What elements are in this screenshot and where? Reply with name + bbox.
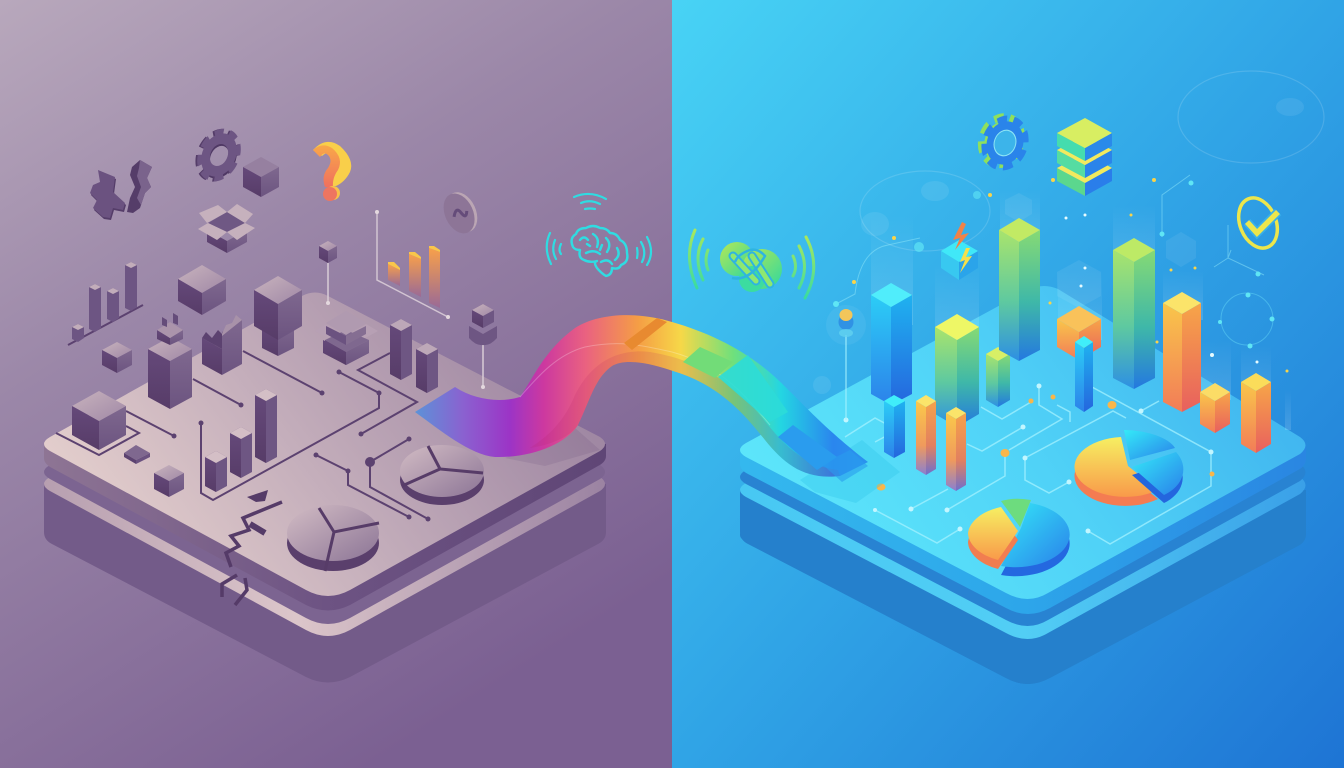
panel: modern platform [740, 286, 1306, 684]
crack in platform [222, 490, 282, 605]
platform lower side [740, 490, 1306, 684]
block: small cube left [102, 342, 132, 373]
icon: bolt cube [941, 222, 978, 280]
platform reflection [44, 378, 605, 681]
panel: legacy platform [44, 292, 606, 682]
icon: blue gear [974, 111, 1032, 172]
platform side [44, 444, 606, 610]
bar: green wide [935, 314, 979, 427]
block: open box on platform [315, 311, 378, 365]
icon: pin marker [826, 305, 866, 420]
transformation ribbon [415, 315, 868, 482]
circuit nodes [844, 384, 1214, 534]
bar: small blue front [884, 395, 905, 458]
bar: green tallest [999, 218, 1040, 361]
platform lower layer side [44, 484, 606, 682]
ribbon shadow [505, 428, 600, 466]
icon: data stack [1057, 118, 1112, 196]
block: stacked tower [254, 276, 302, 356]
platform reflection [740, 371, 1306, 684]
icon: ring [438, 187, 483, 238]
icon: gear [191, 125, 245, 185]
amber nodes [876, 394, 1214, 490]
faint network rings [860, 71, 1324, 251]
faint bubbles [813, 98, 1304, 394]
ribbon segment cyan [718, 355, 788, 422]
platform middle band [740, 313, 1306, 626]
block: step pillars [205, 389, 277, 492]
icon: check badge [1232, 192, 1284, 254]
icon: floating cube [243, 157, 279, 197]
block: tall building with chimney [148, 313, 192, 409]
bar: thin orange one [916, 395, 936, 475]
chart: small orange bars [375, 210, 450, 319]
block: large cube [72, 391, 126, 450]
bar: blue tall [871, 283, 912, 405]
block: pin cube [319, 241, 337, 305]
platform top surface [44, 292, 605, 596]
chart: small colour pie [968, 499, 1070, 576]
ribbon underside shade [530, 351, 840, 477]
ribbon highlight line [520, 344, 770, 425]
icon: brain with signal waves [547, 194, 651, 276]
platform top surface [740, 286, 1306, 599]
circuit nodes [172, 370, 430, 522]
block: broken building [202, 315, 242, 375]
block: flat tile [124, 445, 150, 464]
ribbon body [415, 315, 868, 477]
ribbon segment green [683, 347, 733, 378]
ribbon segment blue [778, 425, 837, 470]
background: modern side [672, 0, 1344, 768]
circuit traces [845, 386, 1211, 544]
platform side [740, 446, 1306, 614]
bar: orange right [1241, 373, 1271, 453]
hologram ghost prisms [871, 190, 1291, 430]
chart: pie on platform right [400, 445, 484, 505]
bar: green small [986, 347, 1010, 407]
bar: thin blue rear [1075, 336, 1093, 412]
icon: open box [198, 204, 255, 253]
chart: purple isometric bars [68, 262, 143, 345]
bar: orange tall [1163, 292, 1201, 412]
bar: orange small [1200, 383, 1230, 433]
hologram circle [1221, 293, 1273, 345]
block: floating slab [178, 265, 226, 315]
platform lower layer [740, 326, 1306, 639]
bar: orange cube [1057, 306, 1101, 360]
faint hexagons [1005, 193, 1196, 308]
tail sheet of ribbon [800, 440, 900, 503]
bar: thin orange two [946, 407, 966, 491]
circuit traces [56, 351, 428, 519]
icon: broken gear [90, 160, 152, 220]
chart: large colour pie [1074, 430, 1183, 506]
icon: chip on stem [469, 304, 497, 389]
platform lower layer [44, 332, 605, 636]
chart: pie on platform front [287, 505, 379, 571]
background: legacy side [0, 0, 672, 768]
ribbon tail tile [822, 450, 868, 482]
network lines and dots [833, 175, 1288, 410]
bar: green tall right [1113, 238, 1155, 389]
block: twin pillars [390, 319, 438, 393]
ribbon fold orange [624, 318, 667, 350]
block: small cube front [154, 465, 184, 497]
icon: question mark [313, 142, 351, 201]
icon: knot with signal waves [689, 230, 814, 298]
platform middle band [44, 320, 605, 624]
